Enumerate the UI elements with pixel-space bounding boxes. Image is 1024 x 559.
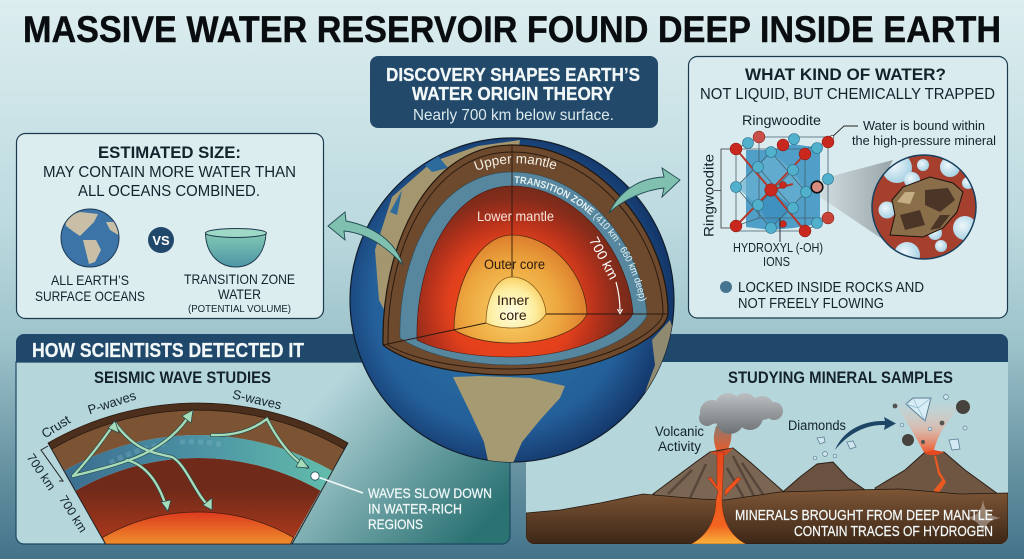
label: inner core: Inner xyxy=(497,292,529,308)
label: outer core: Outer core xyxy=(484,257,545,272)
label: transition zone water: (POTENTIAL VOLUME) xyxy=(188,303,291,315)
panel: studying mineral samples xyxy=(526,362,1008,544)
layer: outer core xyxy=(454,235,587,343)
label: 700 km bracket: 700 km xyxy=(24,451,58,493)
panel: estimated size xyxy=(16,134,324,318)
panel: discovery banner: WATER ORIGIN THEORY xyxy=(412,84,614,104)
callout: waves slow down xyxy=(311,472,492,532)
label: ringwoodite top: Ringwoodite xyxy=(742,112,821,128)
panel: estimated size: ESTIMATED SIZE: xyxy=(98,143,241,162)
arrow: diamonds rising xyxy=(835,417,896,450)
heading: studying mineral samples: STUDYING MINERAL SAMPLES xyxy=(728,368,953,387)
zoom cone xyxy=(817,160,906,255)
label: transition zone water xyxy=(184,271,295,315)
callout: water is bound: the high-pressure mineral xyxy=(852,133,996,148)
panel: estimated size: ALL OCEANS COMBINED. xyxy=(78,183,260,200)
label: upper mantle: Upper mantle xyxy=(474,156,556,170)
illustration: middle volcano xyxy=(777,462,865,500)
label: 700 km edge: 700 km xyxy=(56,493,90,535)
label: volcanic activity: Activity xyxy=(658,439,701,454)
bracket: 700 km xyxy=(41,446,63,481)
icon: vs badge: VS xyxy=(152,233,170,248)
arrows: P-wave and S-wave paths xyxy=(73,410,309,511)
illustration: ground xyxy=(526,489,1008,544)
icon: vs badge xyxy=(148,227,174,253)
panel: what kind of water xyxy=(688,56,1008,318)
callout: waves slow down: REGIONS xyxy=(368,516,423,532)
diagram: seismic cross-section xyxy=(48,403,348,544)
label: volcanic activity: Volcanic xyxy=(655,424,704,439)
label: transition zone water: WATER xyxy=(218,286,261,302)
label: hydroxyl ions: IONS xyxy=(763,255,790,269)
bullet: locked inside rocks: LOCKED INSIDE ROCKS AND xyxy=(738,279,924,296)
cutaway: earth layers xyxy=(382,144,669,376)
panel: what kind of water: WHAT KIND OF WATER? xyxy=(745,65,946,84)
label: transition zone: TRANSITION ZONE (410 km - 660 km deep) xyxy=(514,176,647,301)
arrow: to estimated size xyxy=(328,212,403,265)
illustration: earth globe cutaway xyxy=(350,138,680,470)
label: earth oceans: SURFACE OCEANS xyxy=(35,288,145,304)
label: volcanic activity xyxy=(655,424,704,454)
illustration: left volcano xyxy=(653,393,785,505)
label: inner core xyxy=(497,292,529,323)
label: ringwoodite side: Ringwoodite xyxy=(700,154,716,237)
label: P-waves: P-waves xyxy=(86,388,138,417)
callout: waves slow down: WAVES SLOW DOWN xyxy=(368,485,492,501)
label: 700 km depth: 700 km xyxy=(586,234,622,282)
icon: sparkle xyxy=(965,500,1001,536)
layer: transition zone xyxy=(400,172,647,365)
label: lower mantle: Lower mantle xyxy=(477,208,554,224)
label: earth oceans: ALL EARTH’S xyxy=(51,272,129,288)
panel: estimated size: MAY CONTAIN MORE WATER THAN xyxy=(43,164,296,181)
arrow: depth xyxy=(616,282,622,314)
caption: minerals xyxy=(735,508,993,540)
illustration: lava conduit xyxy=(691,452,746,544)
label: transition zone water: TRANSITION ZONE xyxy=(184,271,295,287)
bullet: locked inside rocks xyxy=(720,279,924,312)
heading: seismic wave studies: SEISMIC WAVE STUDIES xyxy=(94,368,271,387)
panel: discovery banner xyxy=(370,56,658,128)
layer: inner core xyxy=(486,277,546,328)
bracket xyxy=(714,149,730,228)
illustration: right volcano xyxy=(875,400,998,500)
label: inner core: core xyxy=(499,307,527,323)
panel: discovery banner: Nearly 700 km below surface. xyxy=(413,107,614,124)
label: hydroxyl ions: HYDROXYL (-OH) xyxy=(733,241,823,255)
icons: diamonds and rocks xyxy=(813,395,970,460)
panel: discovery banner: DISCOVERY SHAPES EARTH’S xyxy=(386,65,640,85)
panel: how scientists detected it xyxy=(16,334,1008,544)
label: hydroxyl ions xyxy=(733,241,823,269)
heading: how scientists detected it: HOW SCIENTISTS DETECTED IT xyxy=(32,340,304,362)
icon: small earth xyxy=(61,209,120,267)
icon: bowl of water xyxy=(206,228,266,267)
magnified mineral circle xyxy=(872,153,977,268)
callout: water is bound: Water is bound within xyxy=(863,118,985,133)
label: S-waves: S-waves xyxy=(231,387,284,413)
callout: waves slow down: IN WATER-RICH xyxy=(368,500,462,516)
label: diamonds: Diamonds xyxy=(788,418,846,433)
label: crust: Crust xyxy=(39,412,73,441)
layer: lower mantle xyxy=(417,186,633,357)
label: earth oceans xyxy=(35,272,145,304)
panel: what kind of water: NOT LIQUID, BUT CHEMICALLY TRAPPED xyxy=(700,86,995,103)
landmasses xyxy=(375,140,680,470)
line: hydroxyl pointer xyxy=(779,218,781,242)
callout: water is bound xyxy=(830,118,996,148)
rock sample xyxy=(890,177,963,237)
bullet: locked inside rocks: NOT FREELY FLOWING xyxy=(738,295,884,312)
arrow: to water type xyxy=(609,168,680,213)
crystal lattice xyxy=(730,131,834,237)
